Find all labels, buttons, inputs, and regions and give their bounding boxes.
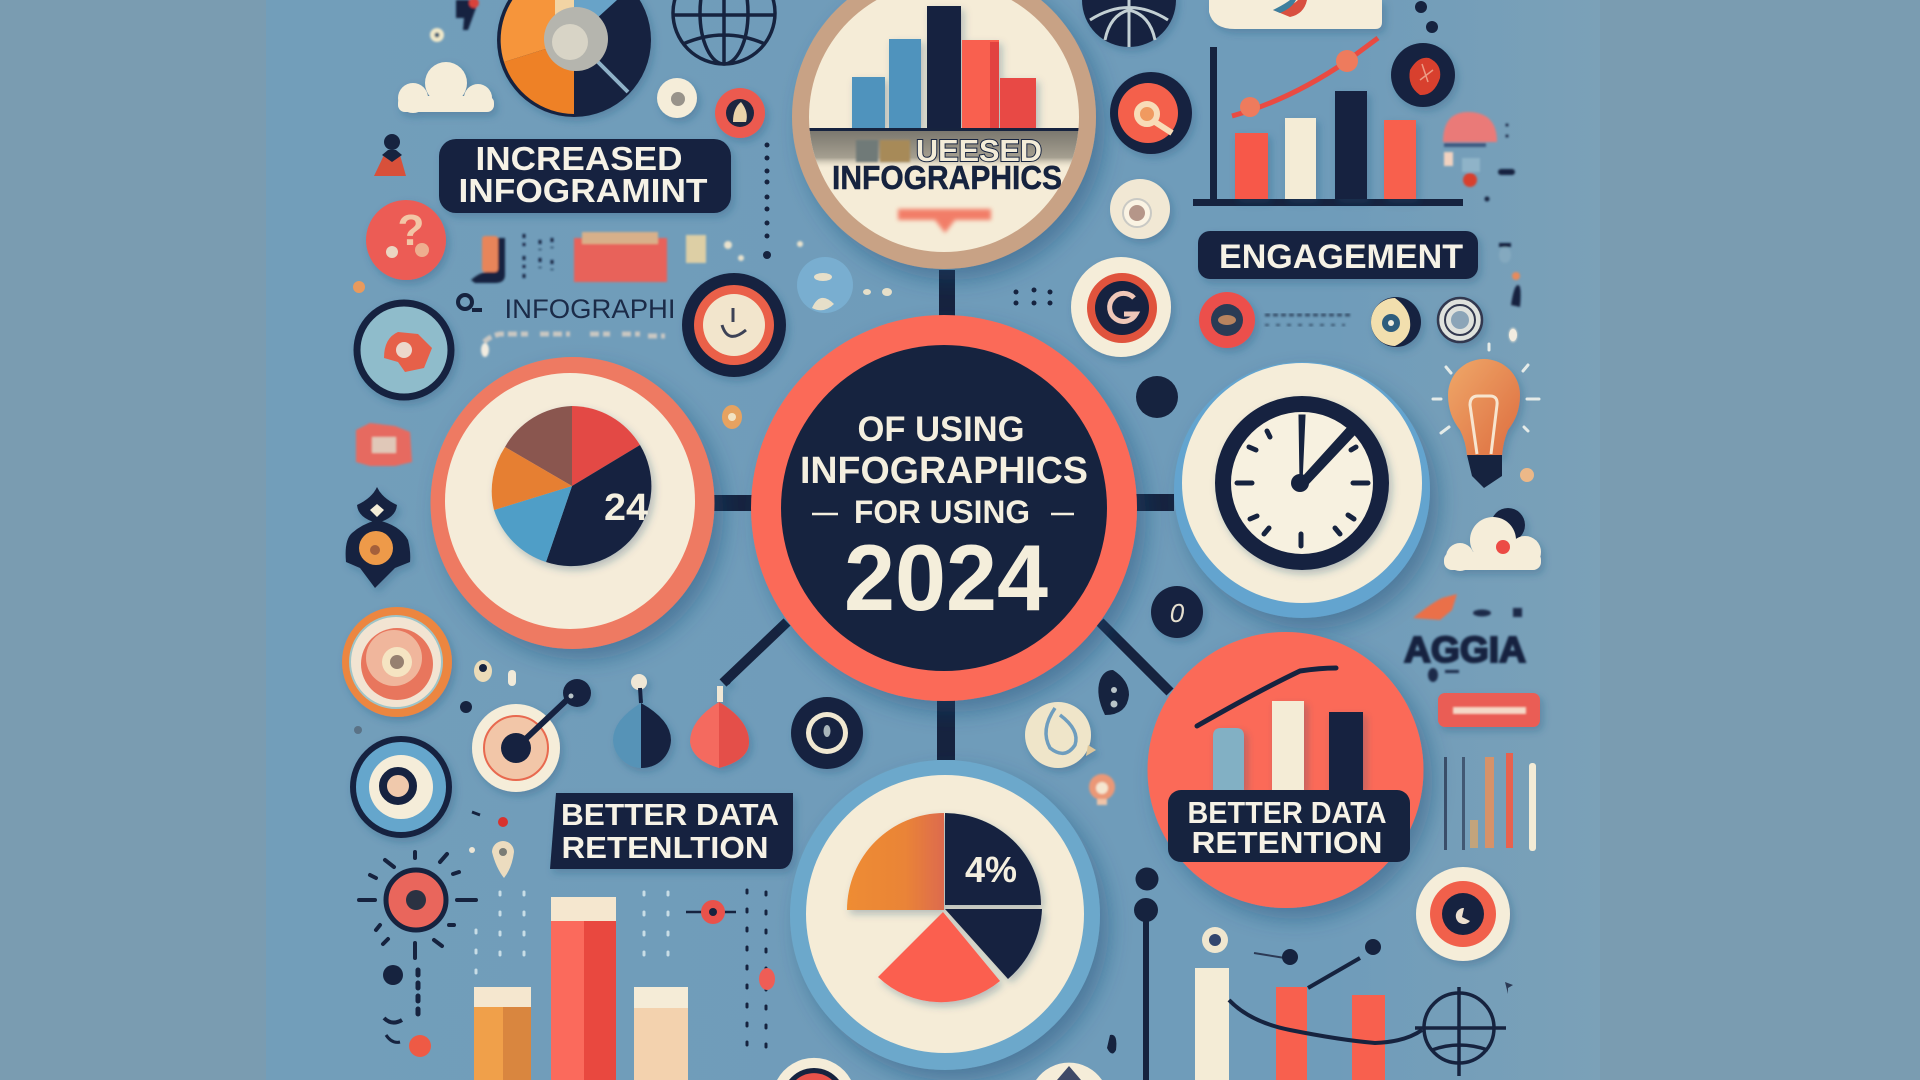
caption infographics: INFOGRAPHICS [832,159,1062,196]
label: increased infogramint [439,139,731,213]
icon: cloud left [398,62,494,113]
label: better data retention right: BETTER DATA [1188,795,1386,830]
icon: concentric swirl [342,607,452,717]
icon: small top ornaments [430,0,479,42]
icon: target left [353,739,449,835]
icon: sun eye [359,852,476,958]
panel: clock [1174,362,1430,618]
title dashes [812,513,1074,515]
label: engagement [1198,231,1478,279]
blurred caption band [809,128,1079,169]
icon: light bulb [1433,329,1539,488]
pie chart [847,813,1042,1002]
icon: lollipop line [1107,868,1158,1080]
icon: cloud right [1444,508,1541,571]
clock face [1223,404,1381,562]
icon: target circle bottom right [1416,867,1510,961]
icon: cream top tab [1209,0,1382,29]
icon: cream dot [657,78,697,118]
bar chart: bottom left [474,897,688,1080]
icon: coral pill [1438,693,1540,727]
garbled icons [856,140,910,162]
icon: pin and dots [469,812,514,878]
pie chart [492,406,651,566]
trend line [1197,668,1336,726]
icon: small red target [686,900,736,924]
icon: magnifier coral circle [1110,72,1192,154]
mini bars right [1444,753,1536,851]
magnifier [596,60,628,92]
dotted traces [418,890,766,1047]
panel: coral bar circle [1148,632,1424,908]
clock hands [1300,416,1304,483]
garbled caption: UEESED [916,133,1042,168]
icon: coral swirl circle [682,273,786,377]
icon: navy zero dot: 0 [1170,598,1185,628]
icon: dark globe right [1082,0,1176,47]
bars [1213,701,1363,790]
icon: top right dots [1415,1,1438,33]
trend curves [1229,1000,1422,1043]
orange blot [1413,594,1457,620]
label: increased infogramint: INCREASED [476,140,682,177]
garbled dotted text [1265,315,1353,325]
label: better data retention right [1168,790,1410,862]
icon: pink blurred left [356,423,412,466]
panel: left pie circle [430,357,714,649]
connector lines [712,270,1174,760]
icon: side ornaments [1499,243,1521,342]
icon: teardrop [1098,670,1129,715]
icon: navy zero dot [1151,586,1203,638]
title line: of using: OF USING [858,410,1024,449]
text: infographi: INFOGRAPHI [504,294,676,324]
icon: coral dots [383,965,775,1057]
tiny marker [1505,982,1513,994]
icon: g circle [1071,257,1171,357]
icon: navy eye circle [791,697,863,769]
label: increased infogramint: INFOGRAMINT [458,172,708,209]
icon: ring with coral blob [357,303,451,397]
icon: question circle: ? [398,206,424,255]
icon: crosshair globe [1415,987,1506,1076]
panel: central title badge [751,315,1137,701]
label: better data retention left: RETENLTION [562,830,768,865]
axes [1193,47,1463,206]
icon: navy dot [1136,376,1178,418]
garbled text: right side [1404,594,1526,682]
icon: orange bead [722,405,742,429]
icon: cream swirl bottom [1025,702,1096,768]
bulb rays [1433,344,1539,433]
trend line [1232,38,1378,116]
main blue panel [266,0,1600,1080]
icon: navy drop ornament [346,487,410,588]
garbled row of icons [471,232,803,283]
pie value: 4% [965,849,1017,890]
icon: small links [458,295,482,310]
icon: person [374,134,406,176]
icon: orange dot left [353,281,365,293]
blurred coral caption [898,209,991,233]
icon: question circle [366,200,446,280]
icon: translucent bubble [797,257,892,313]
icon: blue navy drop [613,674,671,768]
bars [1195,968,1385,1080]
icon: bottom right half circle [1036,1063,1102,1080]
icon: cream navy eye [1371,297,1421,347]
navy blots [1428,608,1522,682]
bars [1235,91,1416,199]
icon: coral eye circle [1199,292,1255,348]
label: better data retention left [550,793,793,869]
panel: bottom pie circle [790,760,1100,1070]
icon: wire globe left [673,0,776,65]
icon: pink blurred ornament [1443,112,1515,202]
garbled text line [481,334,665,357]
bar chart: bottom right [1195,927,1422,1080]
chart: orange pie with magnifier [497,0,651,117]
title line: infographics: INFOGRAPHICS [800,450,1088,492]
panel: top bar chart circle [792,0,1096,269]
dot grid [1014,288,1052,306]
label: better data retention right: RETENTION [1192,825,1382,860]
garbled text: right side: AGGIA [1404,629,1526,670]
icon: small bulb [1089,774,1115,805]
icon: dark heart circle [1391,43,1455,107]
icon: coral flame circle [715,88,765,138]
title year: 2024 [844,525,1048,630]
icon: bottom left half circle [777,1058,851,1080]
dotted column [763,142,771,259]
icon: grey concentric [1438,298,1482,342]
label: better data retention left: BETTER DATA [561,797,779,832]
chart: engagement bars [1193,38,1463,206]
icon: pin gauge [472,679,591,792]
bar chart [852,6,1036,128]
icon: tiny beads [354,660,516,734]
title line: for using: FOR USING [854,494,1030,530]
pie value: 24 [604,487,648,529]
icon: cream swirl [1110,179,1170,239]
label: engagement: ENGAGEMENT [1219,238,1463,276]
icon: coral drop [690,677,749,768]
